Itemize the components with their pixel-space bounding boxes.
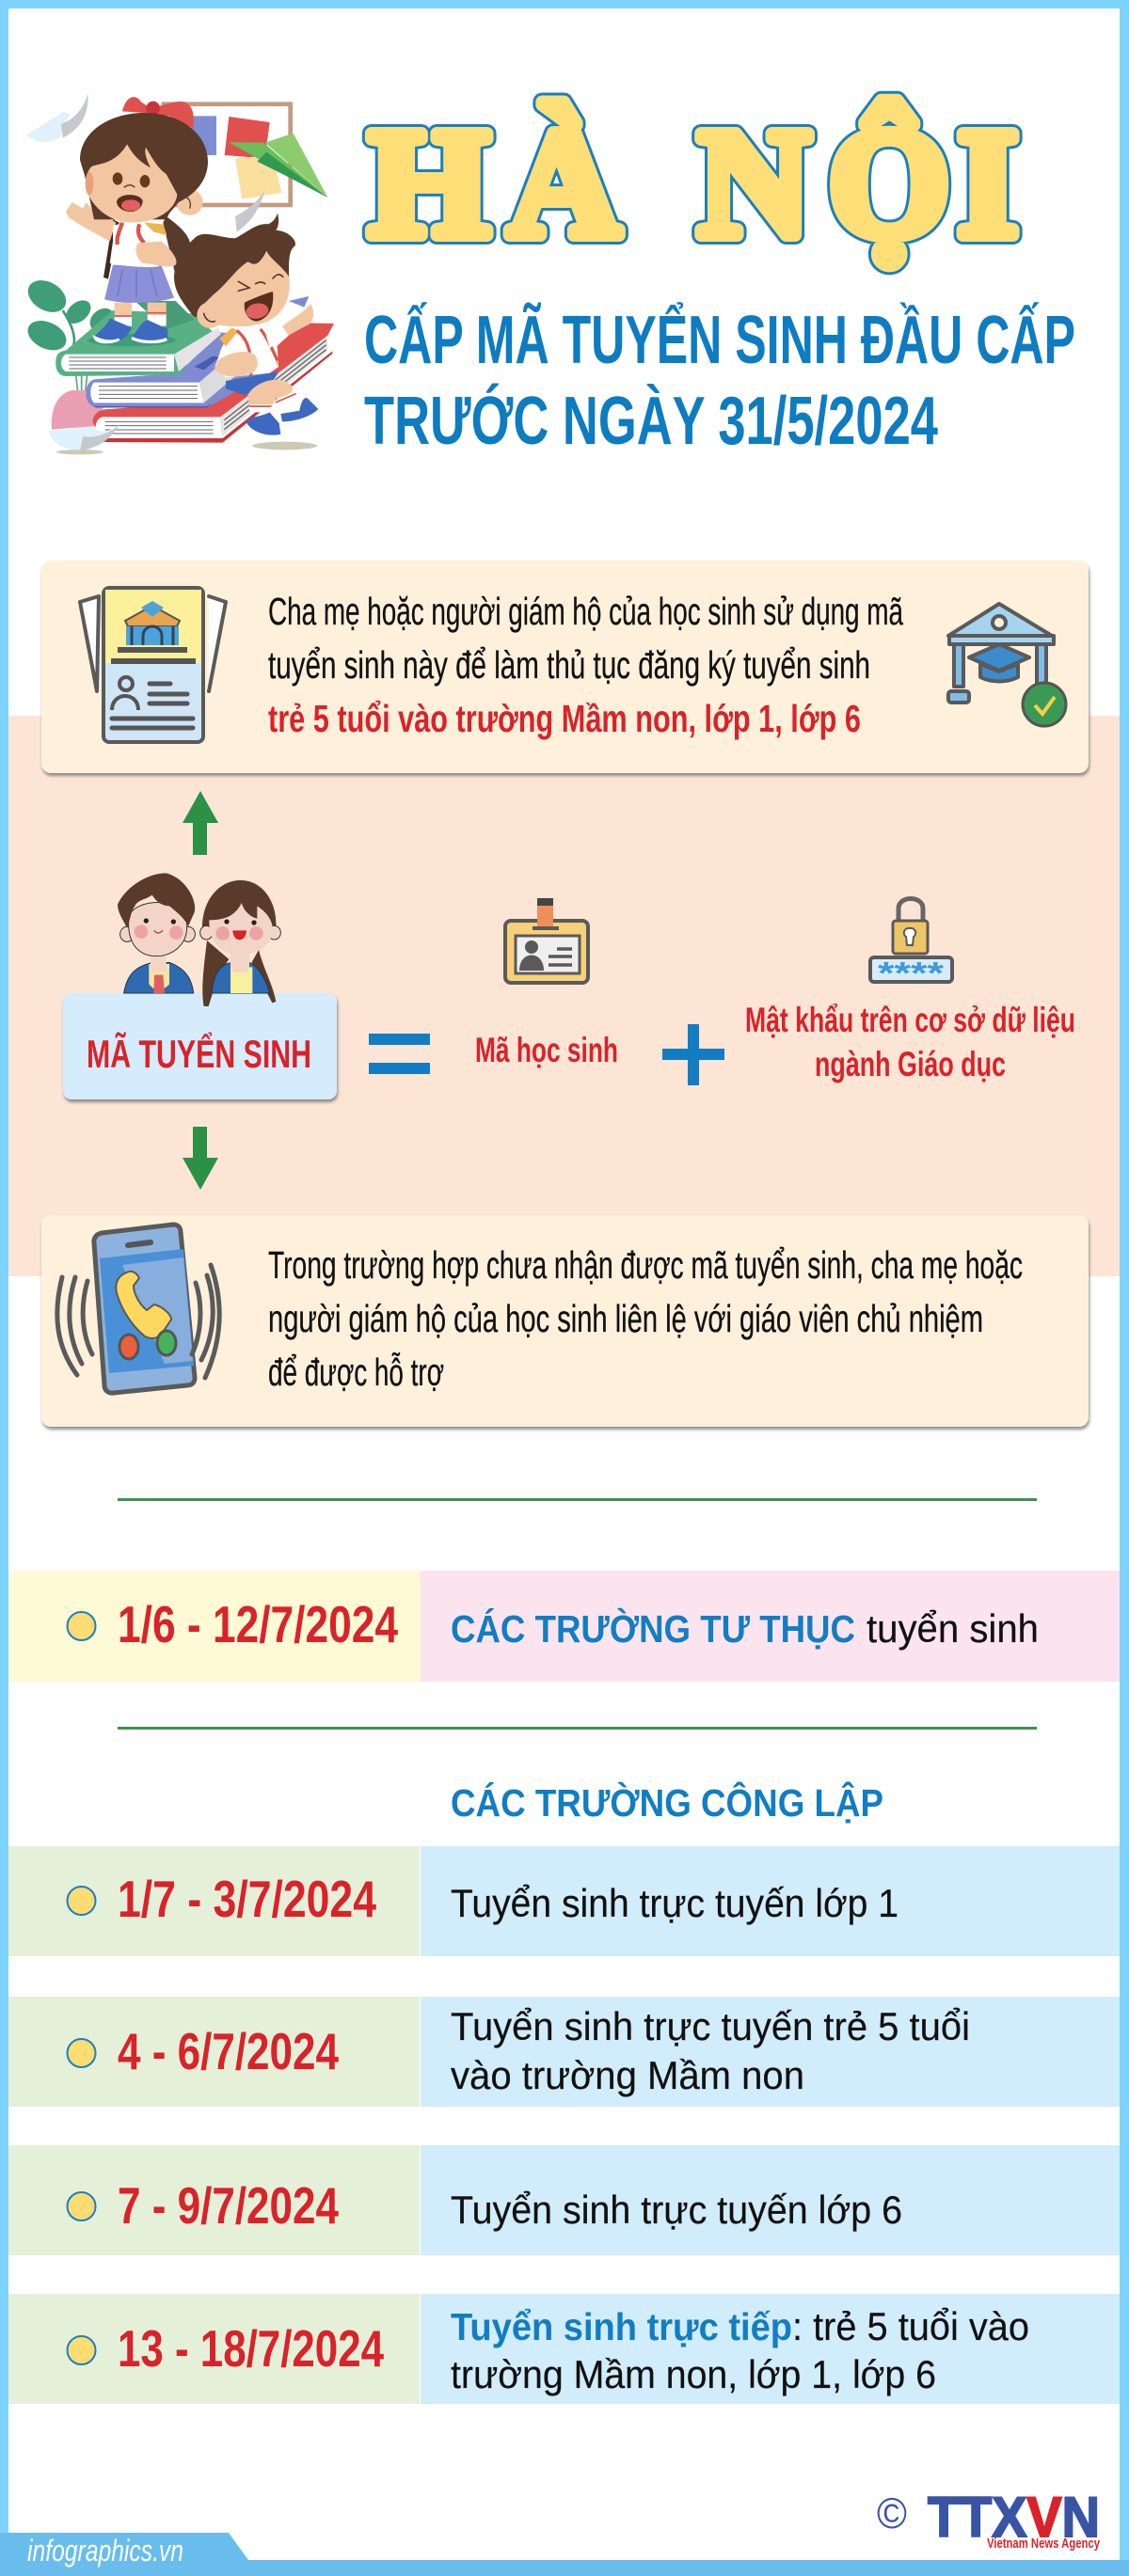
row: private schools: [8, 1571, 1120, 1682]
row: 13 - 18/7/2024: : trẻ 5 tuổi vào: [792, 2304, 1029, 2348]
illustration: two students: [118, 873, 280, 1006]
illustration: children on books: [23, 93, 334, 454]
student code: [475, 898, 618, 1069]
title: HÀ NỘI: HÀ NỘI: [369, 97, 1018, 269]
icon: padlock and password: ****: [878, 956, 944, 990]
row: 4 - 6/7/2024: vào trường Mầm non: [451, 2053, 804, 2097]
row: 13 - 18/7/2024: [8, 2294, 1120, 2404]
row: private schools: 1/6 - 12/7/2024: [118, 1595, 398, 1653]
subtitle: TRƯỚC NGÀY 31/5/2024: [364, 383, 938, 459]
background band: peach: [8, 716, 1120, 1276]
box: MÃ TUYỂN SINH: MÃ TUYỂN SINH: [87, 1031, 311, 1076]
icon: ringing phone: [57, 1225, 219, 1393]
boy student: [118, 873, 195, 993]
row: 1/7 - 3/7/2024: Tuyển sinh trực tuyến lớp 1: [451, 1881, 898, 1925]
subtitle: [364, 302, 1075, 459]
paper plane: [229, 134, 327, 198]
girl: [66, 97, 208, 343]
title: HÀ NỘI: HÀ NỘI: [369, 97, 1018, 269]
heading: public schools: CÁC TRƯỜNG CÔNG LẬP: [451, 1781, 883, 1825]
plus sign: [662, 1024, 724, 1085]
text block: [268, 590, 903, 740]
row: 4 - 6/7/2024: 4 - 6/7/2024: [118, 2022, 339, 2080]
row: private schools: CÁC TRƯỜNG TƯ THỤC: [451, 1607, 855, 1651]
row: 1/7 - 3/7/2024: [8, 1846, 1120, 1956]
row: 13 - 18/7/2024: Tuyển sinh trực tiếp: [451, 2305, 792, 2348]
footer band: infographics.vn: [27, 2534, 183, 2568]
row: 7 - 9/7/2024: [8, 2145, 1120, 2255]
arrow: down: [183, 1127, 218, 1190]
arrow: up: [183, 791, 218, 855]
row: 13 - 18/7/2024: 13 - 18/7/2024: [118, 2319, 384, 2378]
row: 4 - 6/7/2024: [8, 1997, 1120, 2107]
flying papers: [26, 93, 265, 232]
row: 4 - 6/7/2024: Tuyển sinh trực tuyến trẻ 5 tuổi: [451, 2004, 970, 2048]
box: MÃ TUYỂN SINH: [63, 993, 337, 1099]
divider: [118, 1498, 1037, 1501]
text block: [268, 1243, 1023, 1394]
pink vase: [52, 390, 103, 430]
row: 1/7 - 3/7/2024: 1/7 - 3/7/2024: [118, 1870, 376, 1928]
text block: tuyển sinh này để làm thủ tục đăng ký tuyển sinh: [268, 643, 870, 687]
row: 7 - 9/7/2024: Tuyển sinh trực tuyến lớp 6: [451, 2188, 902, 2232]
text block: để được hỗ trợ: [268, 1351, 444, 1394]
copyright mark: ©: [877, 2489, 907, 2537]
plant: [23, 274, 119, 392]
girl student: [200, 880, 280, 1006]
panel: missing code support: [41, 1215, 1089, 1427]
panel: how to use the code: [41, 561, 1089, 773]
text block: trẻ 5 tuổi vào trường Mầm non, lớp 1, lớp 6: [268, 697, 861, 740]
icon: id card: [505, 898, 588, 983]
logo: TTXVN: TTXVN: [928, 2486, 1100, 2549]
row: 13 - 18/7/2024: trường Mầm non, lớp 1, lớp 6: [451, 2352, 936, 2396]
row: 7 - 9/7/2024: 7 - 9/7/2024: [118, 2176, 339, 2235]
paper at bottom-left: [49, 425, 119, 450]
icon: padlock and password: [870, 899, 952, 990]
equals sign: [369, 1034, 430, 1074]
icon: school with graduation cap: [948, 604, 1066, 726]
student code: Mã học sinh: [475, 1031, 618, 1069]
database password: [745, 899, 1075, 1083]
notice board: [164, 104, 291, 205]
footer band: [0, 2533, 1129, 2576]
red book: [92, 323, 334, 443]
icon: cards with school and profile: [80, 588, 226, 742]
row: private schools: tuyển sinh: [867, 1606, 1039, 1651]
divider: [118, 1727, 1037, 1730]
boy: [174, 213, 318, 435]
shadows: [56, 442, 317, 454]
database password: ngành Giáo dục: [815, 1045, 1006, 1083]
green book: [56, 301, 221, 376]
blue book: [86, 332, 279, 407]
